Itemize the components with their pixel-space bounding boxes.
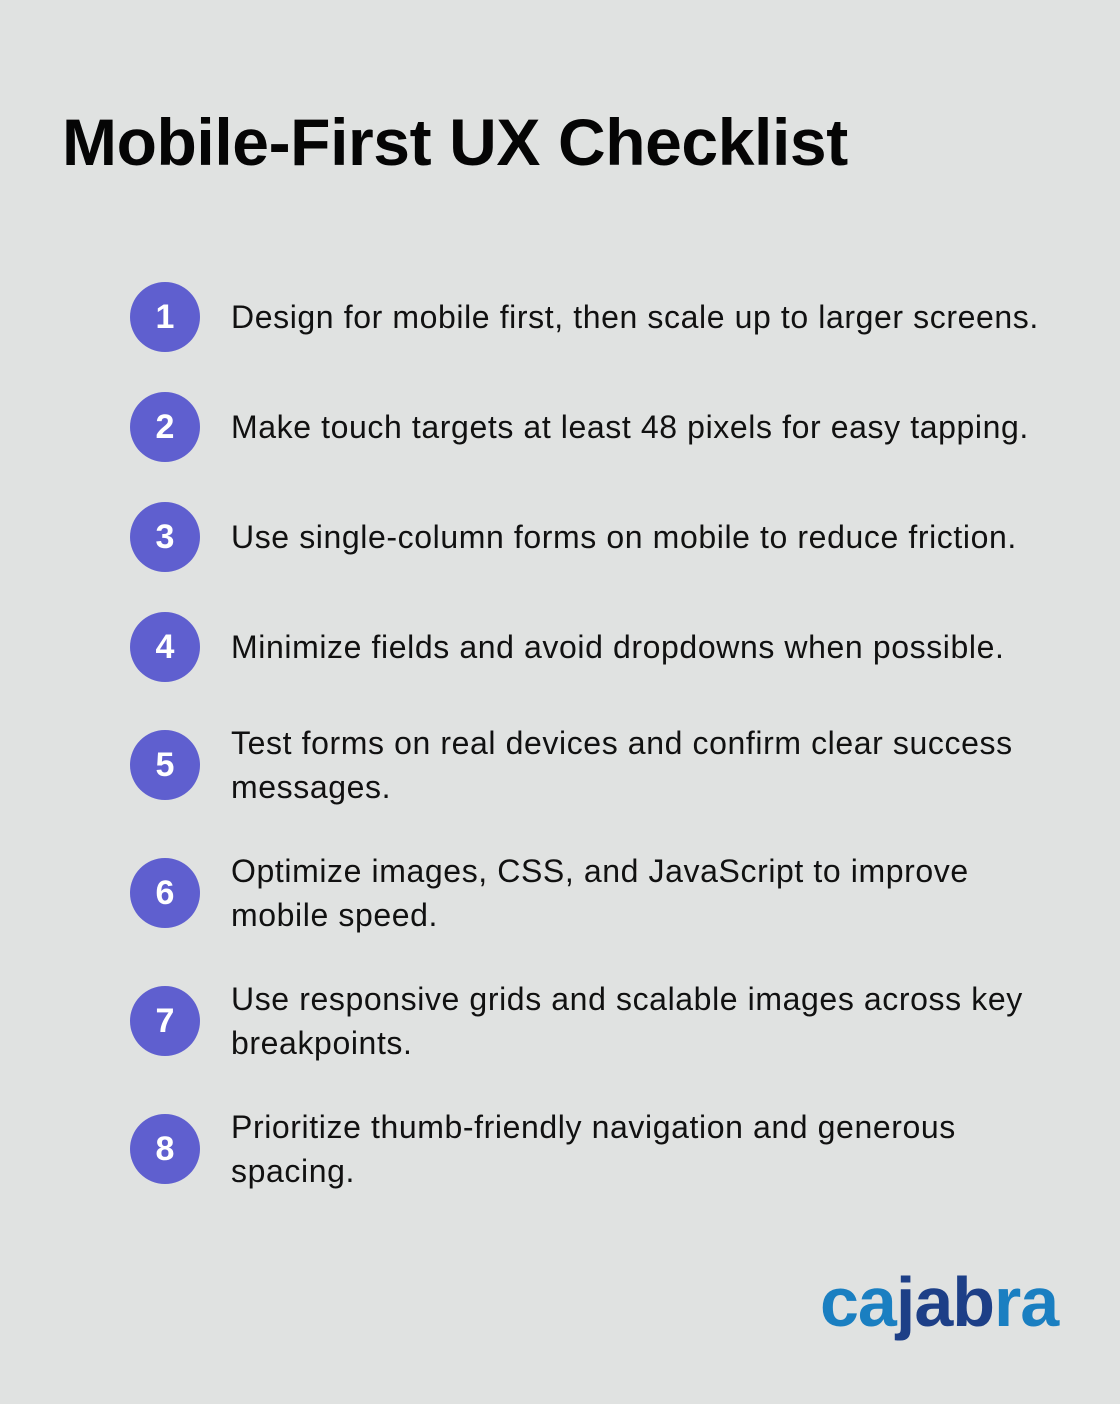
logo: cajabra — [820, 1263, 1058, 1341]
item 4: 4 — [156, 628, 174, 666]
item 7: 7 — [156, 1002, 174, 1040]
item 1: 1 — [156, 298, 174, 336]
item 6: mobile speed. — [231, 897, 438, 933]
item 6: Optimize images, CSS, and JavaScript to improve — [231, 853, 969, 889]
item 3: Use single-column forms on mobile to reduce friction. — [231, 519, 1017, 555]
item 7: breakpoints. — [231, 1025, 413, 1061]
item 5: Test forms on real devices and confirm clear success — [231, 725, 1013, 761]
item 3: 3 — [156, 518, 174, 556]
item 5: messages. — [231, 769, 391, 805]
item 2: 2 — [156, 408, 174, 446]
item 6 — [130, 853, 969, 933]
item 7: Use responsive grids and scalable images across key — [231, 981, 1023, 1017]
title: Mobile-First UX Checklist — [62, 105, 848, 179]
item 8: spacing. — [231, 1153, 355, 1189]
item 5 — [130, 725, 1013, 805]
item 8 — [130, 1109, 956, 1189]
item 3 — [130, 502, 1017, 572]
item 6: 6 — [156, 874, 174, 912]
item 1: Design for mobile first, then scale up to larger screens. — [231, 299, 1039, 335]
item 4: Minimize fields and avoid dropdowns when possible. — [231, 629, 1005, 665]
item 8: 8 — [156, 1130, 174, 1168]
item 2 — [130, 392, 1029, 462]
item 7 — [130, 981, 1023, 1061]
item 5: 5 — [156, 746, 174, 784]
item 1 — [130, 282, 1039, 352]
item 8: Prioritize thumb-friendly navigation and generous — [231, 1109, 956, 1145]
item 4 — [130, 612, 1005, 682]
item 2: Make touch targets at least 48 pixels for easy tapping. — [231, 409, 1029, 445]
